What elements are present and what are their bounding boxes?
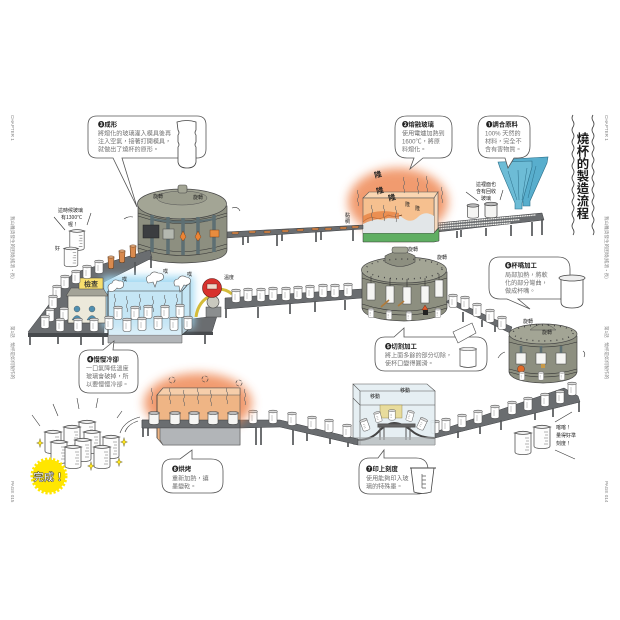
running text: right margin — [603, 115, 610, 503]
belt arch — [358, 423, 435, 440]
note: measuring beakers: 喀喀！ — [556, 424, 571, 431]
callout: step 1 調合原料: 含有害物質。 — [485, 146, 522, 154]
note: 1300 degrees — [54, 207, 91, 230]
sound words: 移動: 移動 — [400, 387, 410, 394]
callout: step 6 杯嘴加工: 做成杯嘴。 — [505, 287, 535, 295]
cooling tank — [108, 282, 190, 343]
callout: step 4 慢慢冷卻: 以要慢慢冷卻。 — [86, 380, 129, 388]
sound words: 隆: 隆 — [375, 184, 386, 197]
lip machine: 旋轉 — [542, 329, 552, 336]
hot beakers — [64, 229, 85, 267]
pressure gauge and hose — [196, 274, 234, 317]
steam curls — [169, 376, 242, 386]
callout: step 5 切割加工: ❺切割加工 — [385, 342, 418, 350]
sound words: 隆: 隆 — [387, 191, 398, 204]
inspection booth — [66, 278, 108, 323]
title: 燒杯的製造流程: 造 — [577, 182, 590, 196]
orange heat glow — [348, 168, 448, 236]
callout: step 1 調合原料: 100% 天然的 — [485, 130, 521, 138]
step 8: lower conveyor left — [142, 410, 358, 447]
note: recycled glass: 玻璃 — [481, 195, 491, 202]
title: 燒杯的製造流程 — [572, 115, 594, 235]
finished beakers — [32, 398, 140, 470]
title: 燒杯的製造流程: 程 — [577, 207, 589, 221]
running text: right margin: 我山雜貨發生的困境(搖滾・長) — [603, 216, 610, 279]
callout: step 3 成形: 注入空氣，接著打開模具， — [98, 138, 171, 146]
callout: step 6 杯嘴加工: 局部加熱，將軟 — [505, 271, 548, 279]
icon: recycled glass buckets — [467, 202, 497, 218]
platform surface — [28, 250, 152, 334]
note: recycled glass: 含有回收 — [476, 188, 496, 195]
running text: right margin: 第1話 燒杯是如何製作的 — [603, 326, 610, 379]
step 3: conveyor from furnace to forming machine — [226, 225, 363, 246]
callout: step 6 杯嘴加工: 化的部分彎曲， — [505, 279, 548, 287]
callout: step 1 調合原料: 材料，完全不 — [485, 138, 522, 146]
sound words: 旋轉 — [153, 193, 203, 201]
note: measuring beakers: 刻度！ — [556, 440, 571, 447]
callout: step 3 成形: ❸成形 — [98, 120, 118, 128]
running text: left margin: CHAPTER 1 — [10, 115, 15, 141]
note: 1300 degrees: 這時候玻璃 — [58, 207, 83, 214]
callout: step 4 慢慢冷卻 — [79, 341, 138, 393]
step 7: printing machine glass box — [353, 384, 435, 445]
step 7: lower conveyor right — [431, 382, 580, 459]
furnace box — [363, 192, 439, 242]
sound words: 移動: 移動 — [370, 393, 380, 400]
step 2: melting furnace — [345, 168, 448, 242]
step 6: conveyor and lip machine — [446, 294, 585, 383]
callout: step 7 印上刻度 — [359, 450, 436, 494]
sound labels: 噗 — [122, 276, 127, 283]
step 5: cutting machine — [362, 246, 447, 321]
running text: left margin: 我山雜貨發生的困境(搖滾・長) — [9, 216, 16, 279]
sound labels: 噗 — [163, 268, 168, 275]
sound words: 隆: 隆 — [373, 168, 384, 181]
callout: step 3 成形 — [88, 116, 206, 207]
callout: step 2 熔融玻璃 — [395, 116, 452, 169]
lip machine: 旋轉 — [523, 318, 533, 325]
callout: step 6 杯嘴加工: ❻杯嘴加工 — [505, 260, 538, 270]
sound words: 旋轉 — [408, 246, 447, 261]
note: 1300 degrees: 喔！ — [68, 221, 78, 228]
step 4: annealing platform — [28, 207, 234, 345]
running text: right margin: CHAPTER 1 — [604, 115, 609, 141]
title: 燒杯的製造流程: 燒 — [577, 131, 590, 146]
callout: step 7 印上刻度: ❼印上刻度 — [366, 464, 399, 473]
sound words: 隆: 隆 — [415, 205, 420, 212]
callout: step 5 切割加工: 將上面多餘的部分切除， — [385, 352, 452, 360]
note: recycled glass — [466, 181, 503, 202]
step 8: baking oven — [142, 373, 252, 445]
callout: step 1 調合原料 — [478, 116, 530, 168]
note: measuring beakers: 量得好準 — [556, 432, 576, 439]
running text: right margin: PAGE 014 — [604, 481, 609, 503]
step 3: forming machine — [124, 185, 240, 263]
callout: step 2 熔融玻璃: 1600℃，將原 — [402, 138, 440, 146]
lip machine — [498, 318, 585, 383]
sound labels: 噗 — [187, 271, 192, 278]
callout: step 4 慢慢冷卻: 玻璃會破掉，所 — [86, 372, 129, 380]
callout: step 8 烘烤 — [162, 450, 223, 493]
note: measuring beakers — [514, 412, 576, 459]
workers — [72, 306, 97, 320]
beakers on platform — [41, 245, 192, 332]
title: 燒杯的製造流程: 的 — [577, 156, 589, 171]
steam clouds — [108, 272, 190, 292]
callout: step 3 成形: 就做出了燒杯的原形。 — [98, 146, 159, 154]
note: 好燙: 好 — [55, 245, 60, 252]
callout: step 6 杯嘴加工 — [489, 257, 585, 309]
sound words: 移動 — [370, 387, 410, 400]
sound words: 旋轉: 旋轉 — [408, 246, 418, 253]
note: 黏稠 — [345, 212, 350, 225]
badge: 完成! — [32, 459, 66, 493]
icon: glass blank — [177, 120, 196, 168]
running text: left margin — [9, 115, 16, 503]
callout: step 1 調合原料: ❶調合原料 — [486, 120, 519, 128]
note: 黏稠: 稠 — [345, 218, 350, 225]
stations with moulds — [143, 215, 219, 255]
icon: beaker rim offcut and body — [453, 323, 476, 368]
callout: step 8 烘烤: 重新加熱，讓 — [172, 474, 209, 482]
yellow print head — [380, 405, 402, 418]
callout: step 8 烘烤: 墨變乾。 — [172, 482, 196, 490]
callout: step 2 熔融玻璃: 料熔化。 — [402, 146, 426, 154]
sparkles — [37, 438, 127, 470]
running text: left margin: 第1話 燒杯是如何製作的 — [9, 326, 16, 379]
inspection booth: 檢查 — [84, 280, 98, 288]
callout: step 7 印上刻度: 使用能夠印入玻 — [366, 474, 409, 482]
heat waves — [357, 176, 443, 222]
running text: left margin: PAGE 015 — [10, 481, 15, 503]
step 1: hopper and raw materials belt — [437, 157, 548, 238]
sound words: 旋轉: 旋轉 — [437, 254, 447, 261]
beakers in machine — [367, 274, 443, 321]
sound words: 旋轉: 旋轉 — [193, 194, 203, 201]
callout: step 2 熔融玻璃: 使用電爐加熱到 — [402, 130, 445, 138]
title: 燒杯的製造流程: 製 — [577, 168, 590, 184]
beakers drying — [149, 412, 238, 424]
sound words: 隆 — [373, 168, 420, 212]
pressure gauge and hose: 溫度 — [224, 274, 234, 281]
callout: step 4 慢慢冷卻: ❹慢慢冷卻 — [87, 354, 119, 364]
callout: step 7 印上刻度: 璃的特殊墨。 — [366, 482, 403, 490]
callout: step 2 熔融玻璃: ❷熔融玻璃 — [402, 120, 435, 128]
sound labels — [122, 268, 192, 283]
sound words: 隆: 隆 — [405, 201, 410, 208]
note: recycled glass: 這裡面也 — [476, 181, 496, 188]
title: 燒杯的製造流程: 杯 — [577, 144, 590, 158]
title: 燒杯的製造流程: 流 — [577, 194, 590, 208]
glow behind tank — [102, 276, 194, 328]
note: 1300 degrees: 有1300℃ — [61, 214, 82, 221]
callout: step 3 成形: 將熔化的玻璃灌入模具後再 — [98, 130, 171, 138]
sound words: 旋轉: 旋轉 — [153, 193, 163, 200]
icon: printed beaker — [410, 468, 436, 494]
badge: 完成!: 完成！ — [33, 470, 65, 484]
icon: beaker with lip — [559, 275, 585, 308]
step 5: conveyor to annealing — [225, 283, 362, 318]
note: 黏稠: 黏 — [345, 212, 350, 219]
orange heat glow — [144, 373, 252, 433]
callout: step 5 切割加工 — [375, 323, 487, 371]
icon: blue hopper — [498, 157, 548, 209]
callout: step 4 慢慢冷卻: 一口氣降低溫度 — [86, 364, 129, 372]
callout: step 5 切割加工: 使杯口變得圓滑。 — [385, 360, 434, 368]
heat waves — [151, 388, 246, 406]
callout: step 8 烘烤: ❽烘烤 — [172, 464, 192, 473]
